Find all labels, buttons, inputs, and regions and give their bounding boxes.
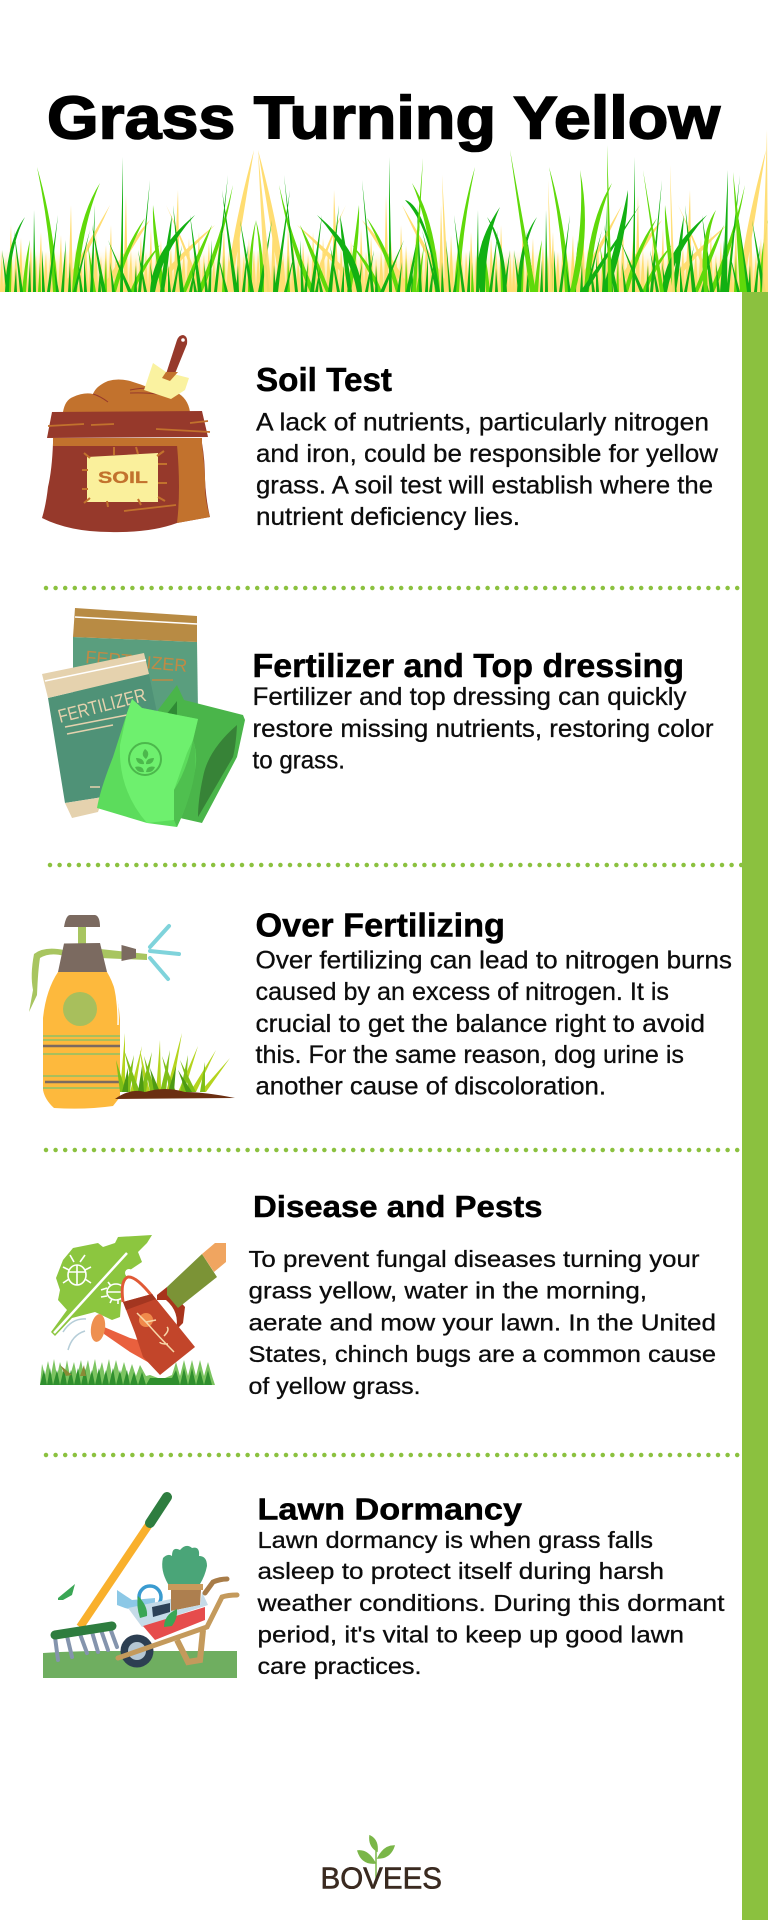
text block: over fertilizing: another cause of discoloration. bbox=[256, 1073, 606, 1101]
bug icons bbox=[63, 1255, 125, 1304]
text block: soil test: and iron, could be responsible for yellow bbox=[256, 440, 719, 468]
text block: over fertilizing: crucial to get the balance right to avoid bbox=[256, 1010, 705, 1038]
text block: disease and pests: grass yellow, water in the morning, bbox=[248, 1278, 647, 1304]
soil label bbox=[82, 447, 167, 507]
icon: rake and wheelbarrow bbox=[43, 1497, 237, 1678]
heading: fertilizer: Fertilizer and Top dressing bbox=[252, 647, 684, 684]
right green sidebar bbox=[742, 292, 768, 1920]
ground grass bbox=[40, 1359, 215, 1385]
text block: disease and pests: To prevent fungal diseases turning your bbox=[248, 1246, 700, 1272]
icon: fertilizer bags: FERTILIZER bbox=[85, 647, 188, 676]
text block: over fertilizing bbox=[256, 947, 732, 1101]
text block: over fertilizing: this. For the same reason, dog urine is bbox=[256, 1041, 684, 1069]
heading: soil test: Soil Test bbox=[256, 361, 392, 398]
text block: fertilizer: to grass. bbox=[252, 747, 345, 775]
heading: lawn dormancy: Lawn Dormancy bbox=[258, 1492, 523, 1527]
text block: fertilizer: restore missing nutrients, restoring color bbox=[252, 715, 714, 743]
text block: soil test: nutrient deficiency lies. bbox=[256, 503, 520, 531]
panel: fertilizer bbox=[42, 608, 714, 827]
text block: over fertilizing: caused by an excess of nitrogen. It is bbox=[256, 978, 669, 1006]
icon: sprout bbox=[358, 1836, 394, 1884]
heading: over fertilizing: Over Fertilizing bbox=[256, 906, 505, 944]
text block: soil test bbox=[256, 408, 719, 531]
text block: fertilizer: Fertilizer and top dressing can quickly bbox=[252, 683, 687, 711]
dotted divider 3 bbox=[46, 1148, 742, 1152]
soil label: SOIL bbox=[98, 468, 148, 487]
text block: disease and pests: of yellow grass. bbox=[248, 1373, 420, 1399]
text block: disease and pests bbox=[248, 1246, 716, 1399]
text block: lawn dormancy bbox=[256, 1527, 725, 1679]
dotted divider 1 bbox=[46, 586, 742, 590]
text block: soil test: grass. A soil test will establish where the bbox=[256, 472, 713, 500]
panel: over fertilizing bbox=[29, 906, 732, 1109]
text block: lawn dormancy: period, it's vital to keep up good lawn bbox=[258, 1622, 684, 1648]
icon: fertilizer bags bbox=[42, 608, 245, 827]
text block: soil test: A lack of nutrients, particularly nitrogen bbox=[256, 408, 709, 436]
icon: fertilizer bags: FERTILIZER bbox=[56, 685, 148, 728]
panel: disease and pests bbox=[40, 1189, 716, 1399]
can flower bbox=[137, 1313, 174, 1352]
grass banner bbox=[0, 130, 768, 292]
logo: Bovees: BOVEES bbox=[320, 1862, 442, 1896]
icon: leaf, bugs and watering can bbox=[40, 1235, 226, 1385]
heading: disease and pests: Disease and Pests bbox=[253, 1189, 542, 1224]
text block: disease and pests: aerate and mow your lawn. In the United bbox=[248, 1310, 716, 1336]
text block: lawn dormancy: Lawn dormancy is when grass falls bbox=[258, 1527, 653, 1553]
panel: lawn dormancy bbox=[43, 1492, 725, 1679]
panel: soil test bbox=[42, 335, 719, 532]
text block: disease and pests: States, chinch bugs are a common cause bbox=[248, 1341, 716, 1367]
text block: over fertilizing: Over fertilizing can lead to nitrogen burns bbox=[256, 947, 732, 975]
text block: lawn dormancy: asleep to protect itself during harsh bbox=[258, 1558, 664, 1584]
dotted divider 2 bbox=[50, 863, 742, 867]
icon: soil sack with trowel bbox=[42, 335, 210, 532]
text block: fertilizer bbox=[252, 683, 714, 775]
logo: Bovees bbox=[320, 1836, 442, 1896]
grass tuft bbox=[115, 1033, 235, 1099]
potted plant bbox=[162, 1546, 207, 1611]
text block: lawn dormancy: care practices. bbox=[258, 1653, 422, 1679]
text block: lawn dormancy: weather conditions. During this dormant bbox=[256, 1590, 725, 1616]
fertilizer pouch emblem bbox=[129, 743, 161, 775]
title: Grass Turning Yellow bbox=[47, 84, 720, 152]
icon: spray bottle and grass tuft bbox=[29, 915, 235, 1109]
dotted divider 4 bbox=[46, 1453, 742, 1457]
